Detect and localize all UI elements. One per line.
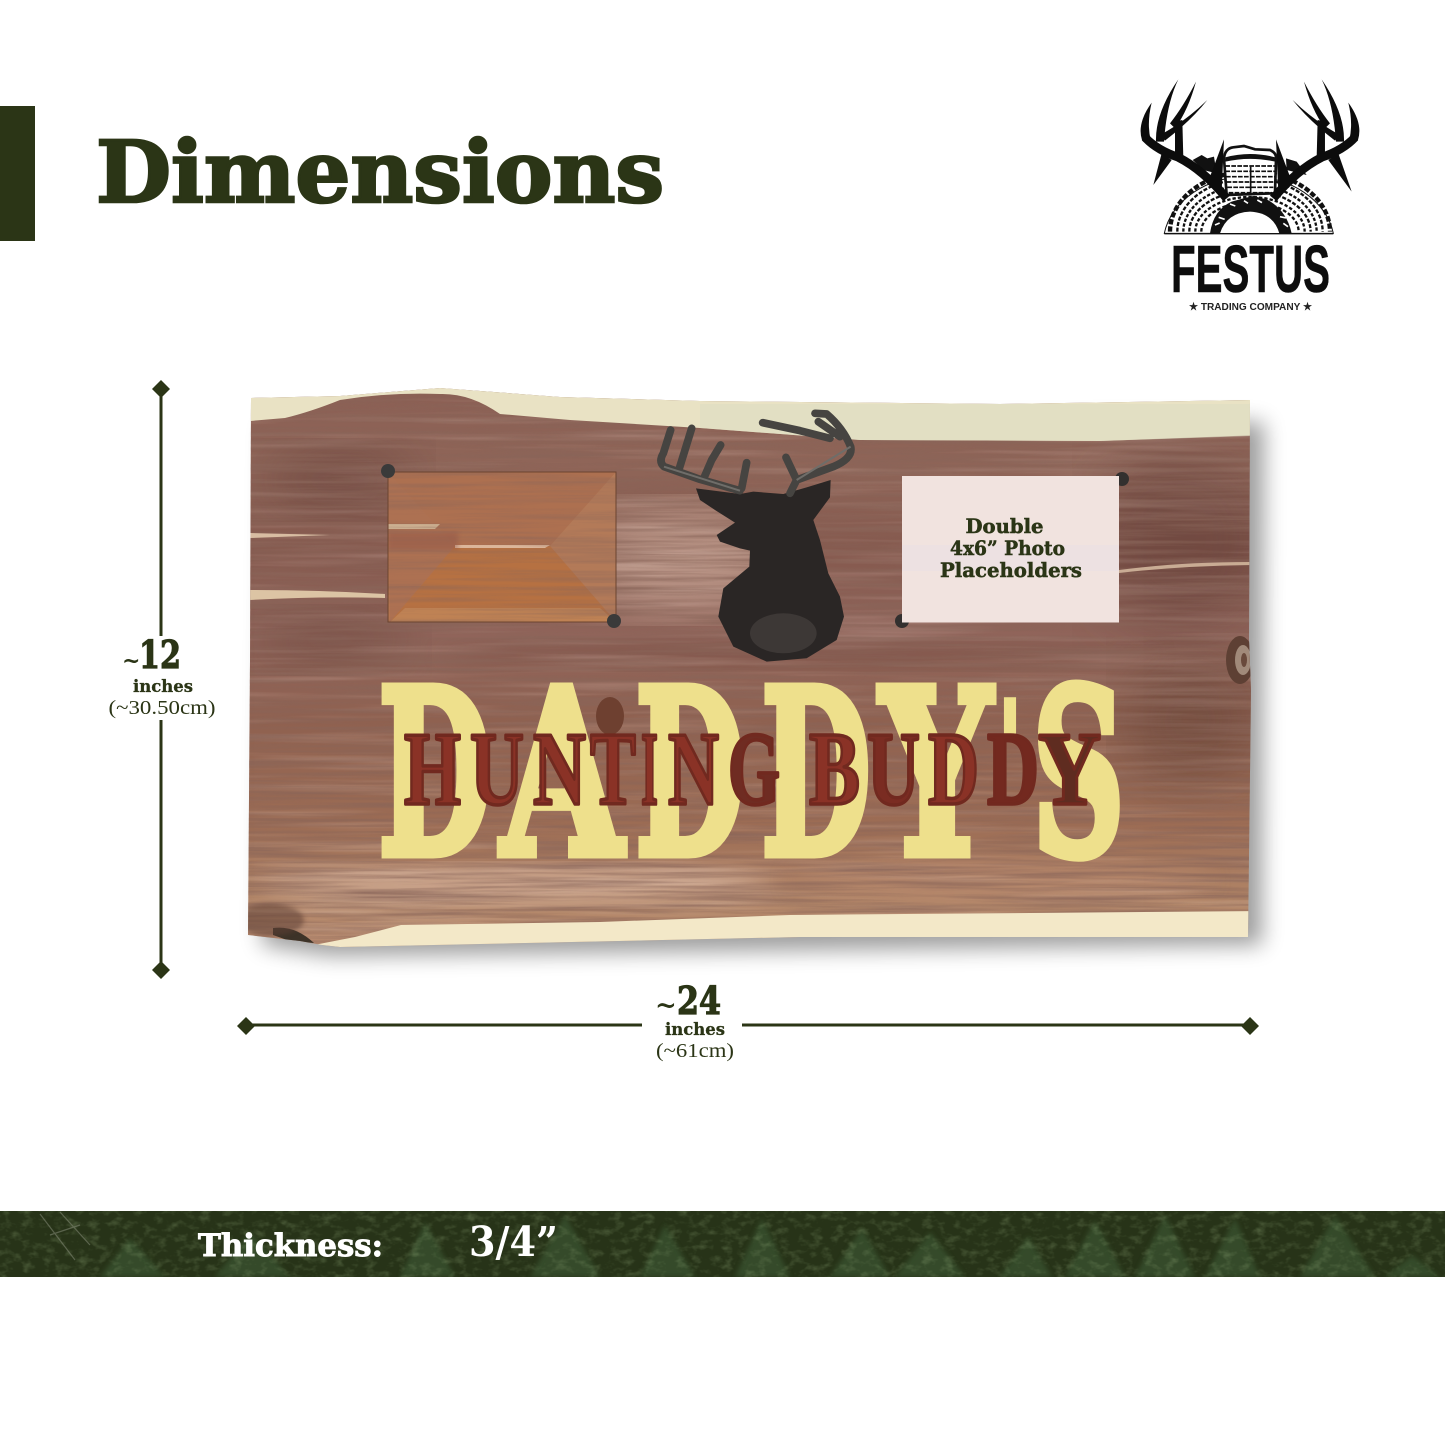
width value: 24	[677, 978, 721, 1023]
logo icon: antlers over tree rings	[1141, 79, 1359, 234]
shadow under board	[262, 422, 1264, 956]
mounting peg	[895, 614, 909, 628]
width metric: (~61cm)	[656, 1040, 734, 1062]
metal lettering: HUNTING BUDDY: T	[590, 710, 636, 827]
panel: wooden sign	[236, 380, 1270, 960]
vertical dimension: height	[100, 380, 222, 979]
mounting peg	[1115, 472, 1129, 486]
metal lettering: HUNTING BUDDY: D	[987, 710, 1039, 827]
title: Dimensions	[96, 123, 664, 223]
placeholder label: Double	[966, 514, 1044, 538]
logo tagline: ★ TRADING COMPANY ★	[1189, 301, 1313, 313]
left photo placeholder: cedar frame	[388, 472, 616, 622]
metal lettering: HUNTING BUDDY: H	[404, 710, 461, 827]
metal lettering: HUNTING BUDDY: U	[867, 710, 920, 827]
knot	[1226, 636, 1250, 684]
thickness band	[0, 1211, 1445, 1277]
width value: ~	[655, 991, 677, 1021]
height value: ~	[122, 648, 140, 674]
carved lettering: DADDY'S: S	[1032, 640, 1125, 909]
carved lettering: DADDY'S	[378, 640, 1125, 909]
right antler	[1273, 79, 1359, 198]
metal lettering: HUNTING BUDDY	[404, 710, 1101, 827]
horizontal dimension: width	[237, 978, 1259, 1062]
mounting peg	[607, 614, 621, 628]
mounting peg	[381, 464, 395, 478]
left antler	[1141, 79, 1227, 198]
carved lettering: DADDY'S: Y	[878, 640, 994, 909]
height value: 12	[139, 632, 181, 677]
sapwood bottom	[318, 911, 1248, 947]
logo wordmark: FESTUS	[1171, 232, 1330, 307]
metal lettering: HUNTING BUDDY: N	[533, 710, 586, 827]
carved lettering: DADDY'S: '	[1001, 681, 1019, 799]
forest texture	[0, 1211, 1445, 1277]
accent bar	[0, 106, 35, 241]
carved lettering: DADDY'S: D	[378, 640, 492, 909]
height metric: (~30.50cm)	[108, 697, 216, 719]
placeholder label: Placeholders	[940, 558, 1082, 582]
right photo placeholder	[902, 476, 1119, 622]
carved lettering: DADDY'S: D	[635, 640, 745, 909]
metal lettering: HUNTING BUDDY: U	[470, 710, 524, 827]
sapwood top	[251, 388, 1250, 441]
metal lettering: HUNTING BUDDY: Y	[1038, 710, 1101, 827]
carved lettering: DADDY'S: A	[500, 640, 625, 909]
width unit: inches	[665, 1020, 725, 1039]
metal lettering: HUNTING BUDDY: N	[668, 710, 719, 827]
metal lettering: HUNTING BUDDY: D	[928, 710, 979, 827]
height unit: inches	[133, 677, 193, 696]
knot over lettering	[596, 697, 624, 735]
icon: metal deer head	[661, 413, 851, 662]
carved lettering: DADDY'S: D	[761, 640, 871, 909]
metal lettering: HUNTING BUDDY: B	[809, 710, 860, 827]
logo: Festus Trading Company	[1141, 79, 1359, 313]
metal lettering: HUNTING BUDDY: I	[641, 710, 658, 827]
metal lettering: HUNTING BUDDY: G	[728, 710, 780, 827]
placeholder label: 4x6” Photo	[950, 536, 1065, 560]
thickness value: 3/4”	[469, 1218, 558, 1266]
thickness label: Thickness:	[198, 1228, 383, 1264]
